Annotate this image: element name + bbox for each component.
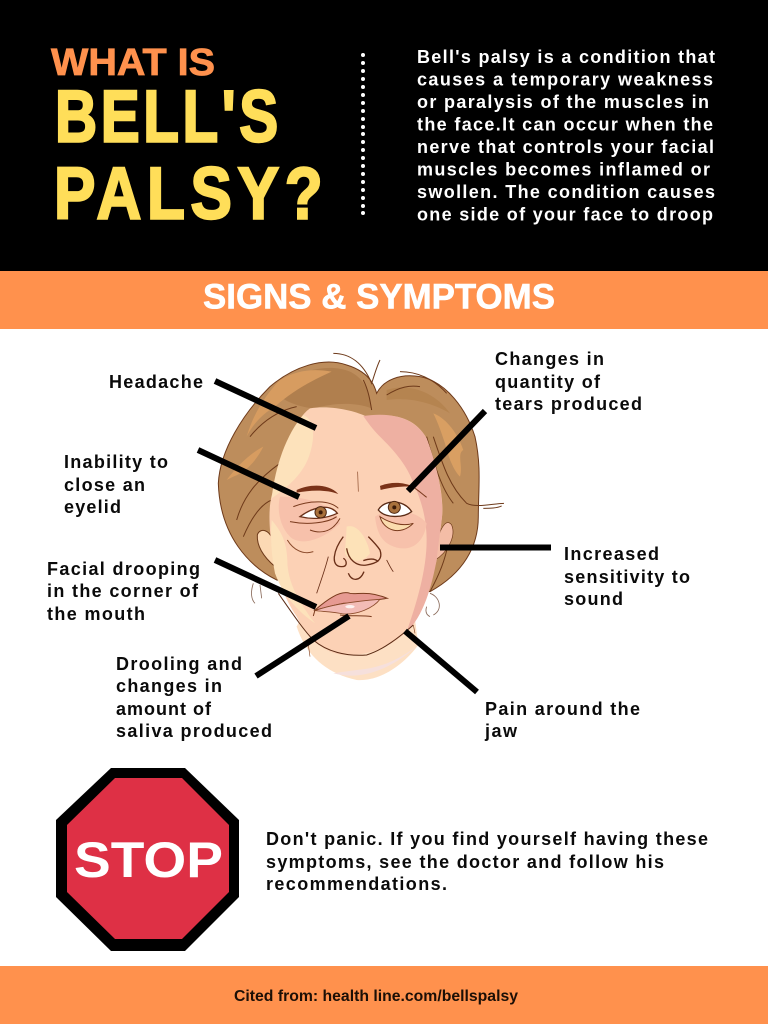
label: sound: Increased (564, 544, 659, 564)
leader lines (198, 381, 551, 692)
advice text (266, 829, 708, 894)
definition text: swollen. The condition causes (417, 182, 715, 202)
title: PALSY? (54, 154, 323, 235)
label: tears: quantity of (495, 372, 601, 392)
light forehead strip (272, 415, 313, 498)
label: mouth: in the corner of (47, 581, 199, 601)
label: mouth (47, 559, 200, 624)
light lower cheek strip (271, 520, 315, 623)
dotted divider (361, 53, 365, 215)
nose (334, 537, 381, 579)
footer: Cited from: health line.com/bellspalsy (234, 988, 518, 1005)
advice text: Don't panic. If you find yourself having these (266, 829, 708, 849)
label: saliva: saliva produced (116, 721, 272, 741)
signs and symptoms banner (0, 271, 768, 329)
label: eyelid: close an (64, 475, 145, 495)
eye socket shading (279, 497, 427, 548)
forehead crease (357, 472, 359, 492)
definition text: nerve that controls your facial (417, 137, 714, 157)
label: mouth: the mouth (47, 604, 145, 624)
label: jaw: jaw (484, 721, 518, 741)
header panel (0, 0, 768, 271)
label: saliva: changes in (116, 676, 222, 696)
title: BELL'S (55, 76, 278, 158)
definition text: or paralysis of the muscles in (417, 92, 709, 112)
left brow and eye (287, 486, 340, 553)
neck (297, 607, 418, 680)
advice text: symptoms, see the doctor and follow his (266, 852, 664, 872)
advice text: recommendations. (266, 874, 447, 894)
label: tears (495, 349, 642, 414)
label: saliva (116, 654, 272, 741)
footer (0, 966, 768, 1024)
mouth (313, 593, 387, 617)
label: eyelid: eyelid (64, 497, 121, 517)
label: eyelid (64, 452, 168, 517)
label: tears: tears produced (495, 394, 642, 414)
left ear (257, 530, 275, 567)
face skin (269, 407, 442, 655)
illustration: face with facial palsy (218, 353, 504, 680)
label: eyelid: Inability to (64, 452, 168, 472)
title (51, 42, 323, 235)
shaded forehead and right side (363, 415, 442, 632)
label: sound: sound (564, 589, 623, 609)
signs and symptoms banner: SIGNS & SYMPTOMS (203, 278, 555, 316)
definition text: one side of your face to droop (417, 204, 713, 224)
label: jaw: Pain around the (485, 699, 640, 719)
label: headache: Headache (109, 372, 203, 392)
icon: stop sign (56, 768, 239, 951)
definition text: the face.It can occur when the (417, 114, 713, 134)
definition text (417, 47, 715, 224)
right ear (435, 523, 453, 560)
label: sound: sensitivity to (564, 567, 690, 587)
label: saliva: Drooling and (116, 654, 242, 674)
right brow and eye (378, 483, 427, 531)
definition text: muscles becomes inflamed or (417, 160, 710, 180)
label: saliva: amount of (116, 699, 212, 719)
jawline (278, 593, 413, 655)
label: tears: Changes in (495, 349, 604, 369)
icon: stop sign: STOP (74, 832, 223, 888)
nose highlight (345, 526, 370, 561)
title: WHAT IS (51, 42, 215, 84)
label: mouth: Facial drooping (47, 559, 200, 579)
label: jaw (484, 699, 640, 741)
definition text: Bell's palsy is a condition that (417, 47, 715, 67)
hair (218, 362, 479, 592)
label: sound (564, 544, 690, 609)
definition text: causes a temporary weakness (417, 70, 713, 90)
